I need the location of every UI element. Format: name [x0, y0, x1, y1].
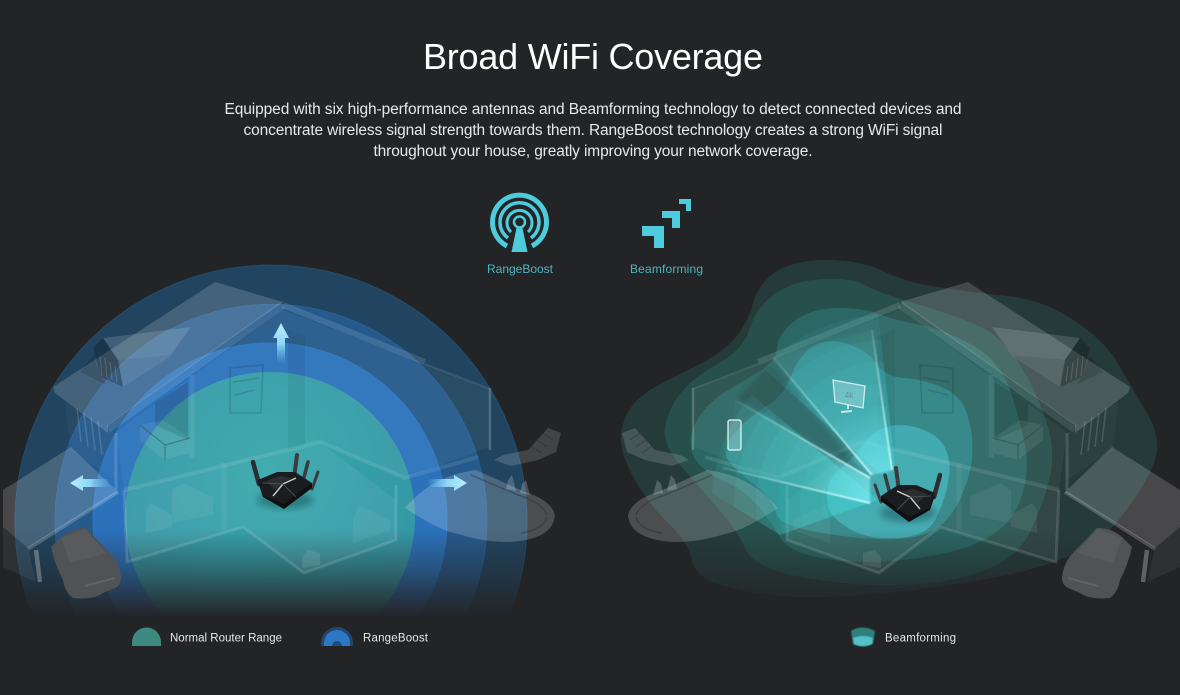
- router: [253, 455, 318, 509]
- label: Beamforming: Beamforming: [630, 262, 703, 276]
- icon: 4K monitor: 4k: [845, 391, 854, 400]
- coverage rings: [15, 265, 527, 625]
- arrow right: [427, 475, 467, 491]
- signal lobes towards monitor: [764, 316, 895, 476]
- legend: Normal Router Range: [132, 628, 282, 646]
- panel: RangeBoost diagram: [3, 265, 561, 625]
- beam to monitor: [773, 330, 892, 475]
- intro paragraph: throughout your house, greatly improving your network coverage.: [374, 143, 812, 160]
- legend: Normal Router Range: Normal Router Range: [170, 632, 282, 644]
- signal lobes towards phone: [712, 395, 878, 535]
- gap between beams: [738, 362, 868, 478]
- legend: Beamforming: Beamforming: [885, 632, 956, 644]
- house cutaway: [622, 282, 1180, 598]
- intro paragraph: [224, 101, 962, 160]
- arrow up: [273, 323, 289, 364]
- arrow left: [70, 475, 110, 491]
- coverage blobs: [621, 260, 1157, 597]
- intro paragraph: concentrate wireless signal strength towards them. RangeBoost technology creates a strong WiFi signal: [244, 122, 942, 139]
- legend: Beamforming: [851, 628, 956, 646]
- legend: RangeBoost: RangeBoost: [363, 632, 429, 644]
- icon: RangeBoost: [493, 195, 546, 252]
- icon: phone: [728, 420, 741, 450]
- icon: 4K monitor: [833, 380, 865, 412]
- beam to phone: [723, 400, 870, 503]
- intro paragraph: Equipped with six high-performance antennas and Beamforming technology to detect connected devices and: [224, 101, 962, 118]
- router: [875, 468, 940, 522]
- title: Broad WiFi Coverage: [423, 36, 763, 77]
- label: RangeBoost: RangeBoost: [487, 262, 554, 276]
- icon: Beamforming: [642, 199, 691, 248]
- panel: Beamforming diagram: [621, 260, 1180, 598]
- legend: RangeBoost: [321, 627, 429, 646]
- house cutaway: [3, 282, 561, 598]
